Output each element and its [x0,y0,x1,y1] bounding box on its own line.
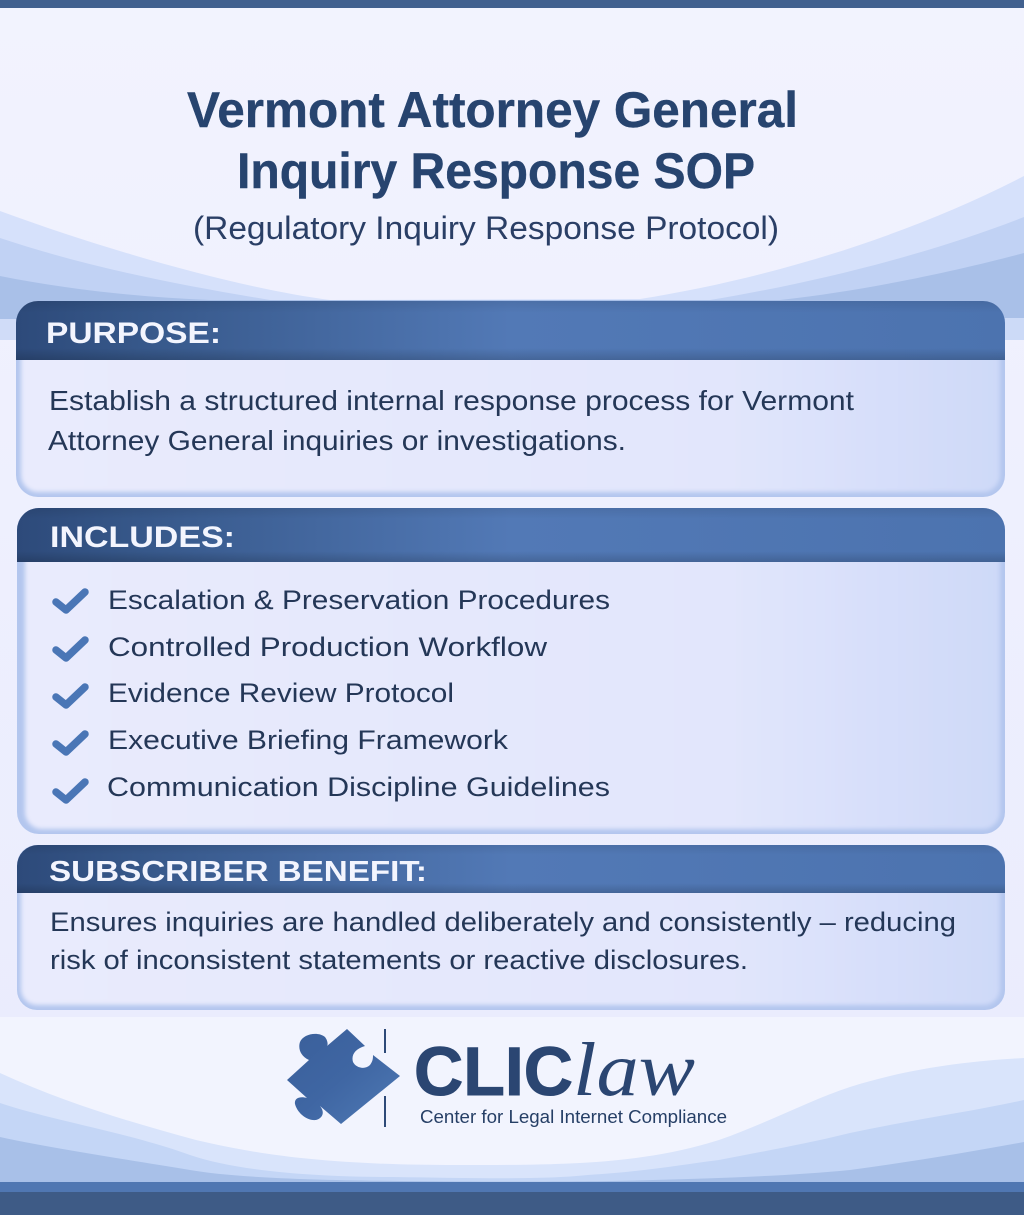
purpose text: Attorney General inquiries or investigations. [48,425,626,456]
panel: purpose [16,301,1005,497]
purpose text: Establish a structured internal response process for Vermont [49,385,854,416]
purpose header [16,301,1005,360]
item: communication: Communication Discipline Guidelines [107,772,610,802]
includes header: INCLUDES: [50,521,235,554]
benefit header [17,845,1005,893]
logo wordmark: CLIC [414,1033,573,1110]
item: evidence: Evidence Review Protocol [108,678,454,708]
icon: puzzle piece [287,1029,400,1124]
title [187,82,798,199]
benefit text: Ensures inquiries are handled deliberately and consistently – reducing [50,907,956,937]
item: escalation: Escalation & Preservation Procedures [108,585,610,615]
benefit header: SUBSCRIBER BENEFIT: [49,856,427,888]
panel: subscriber benefit [17,845,1005,1010]
benefit text: risk of inconsistent statements or reactive disclosures. [50,945,748,975]
checklist [56,585,610,802]
benefit text [50,907,956,975]
item: briefing: Executive Briefing Framework [108,725,509,755]
title: Inquiry Response SOP [237,143,755,199]
includes header [17,508,1005,562]
item: production: Controlled Production Workflow [108,632,548,662]
title: Vermont Attorney General [187,82,798,138]
top bar [0,0,1024,8]
logo divider [384,1029,386,1127]
top waves [0,176,1024,340]
logo [287,1028,727,1127]
bottom waves [0,1017,1024,1182]
panel: includes [17,508,1005,834]
purpose text [48,385,854,456]
logo: law [573,1028,695,1112]
logo tagline: Center for Legal Internet Compliance [420,1107,727,1127]
subtitle: (Regulatory Inquiry Response Protocol) [193,210,779,246]
purpose header: PURPOSE: [46,317,221,350]
bottom bar [0,1182,1024,1215]
